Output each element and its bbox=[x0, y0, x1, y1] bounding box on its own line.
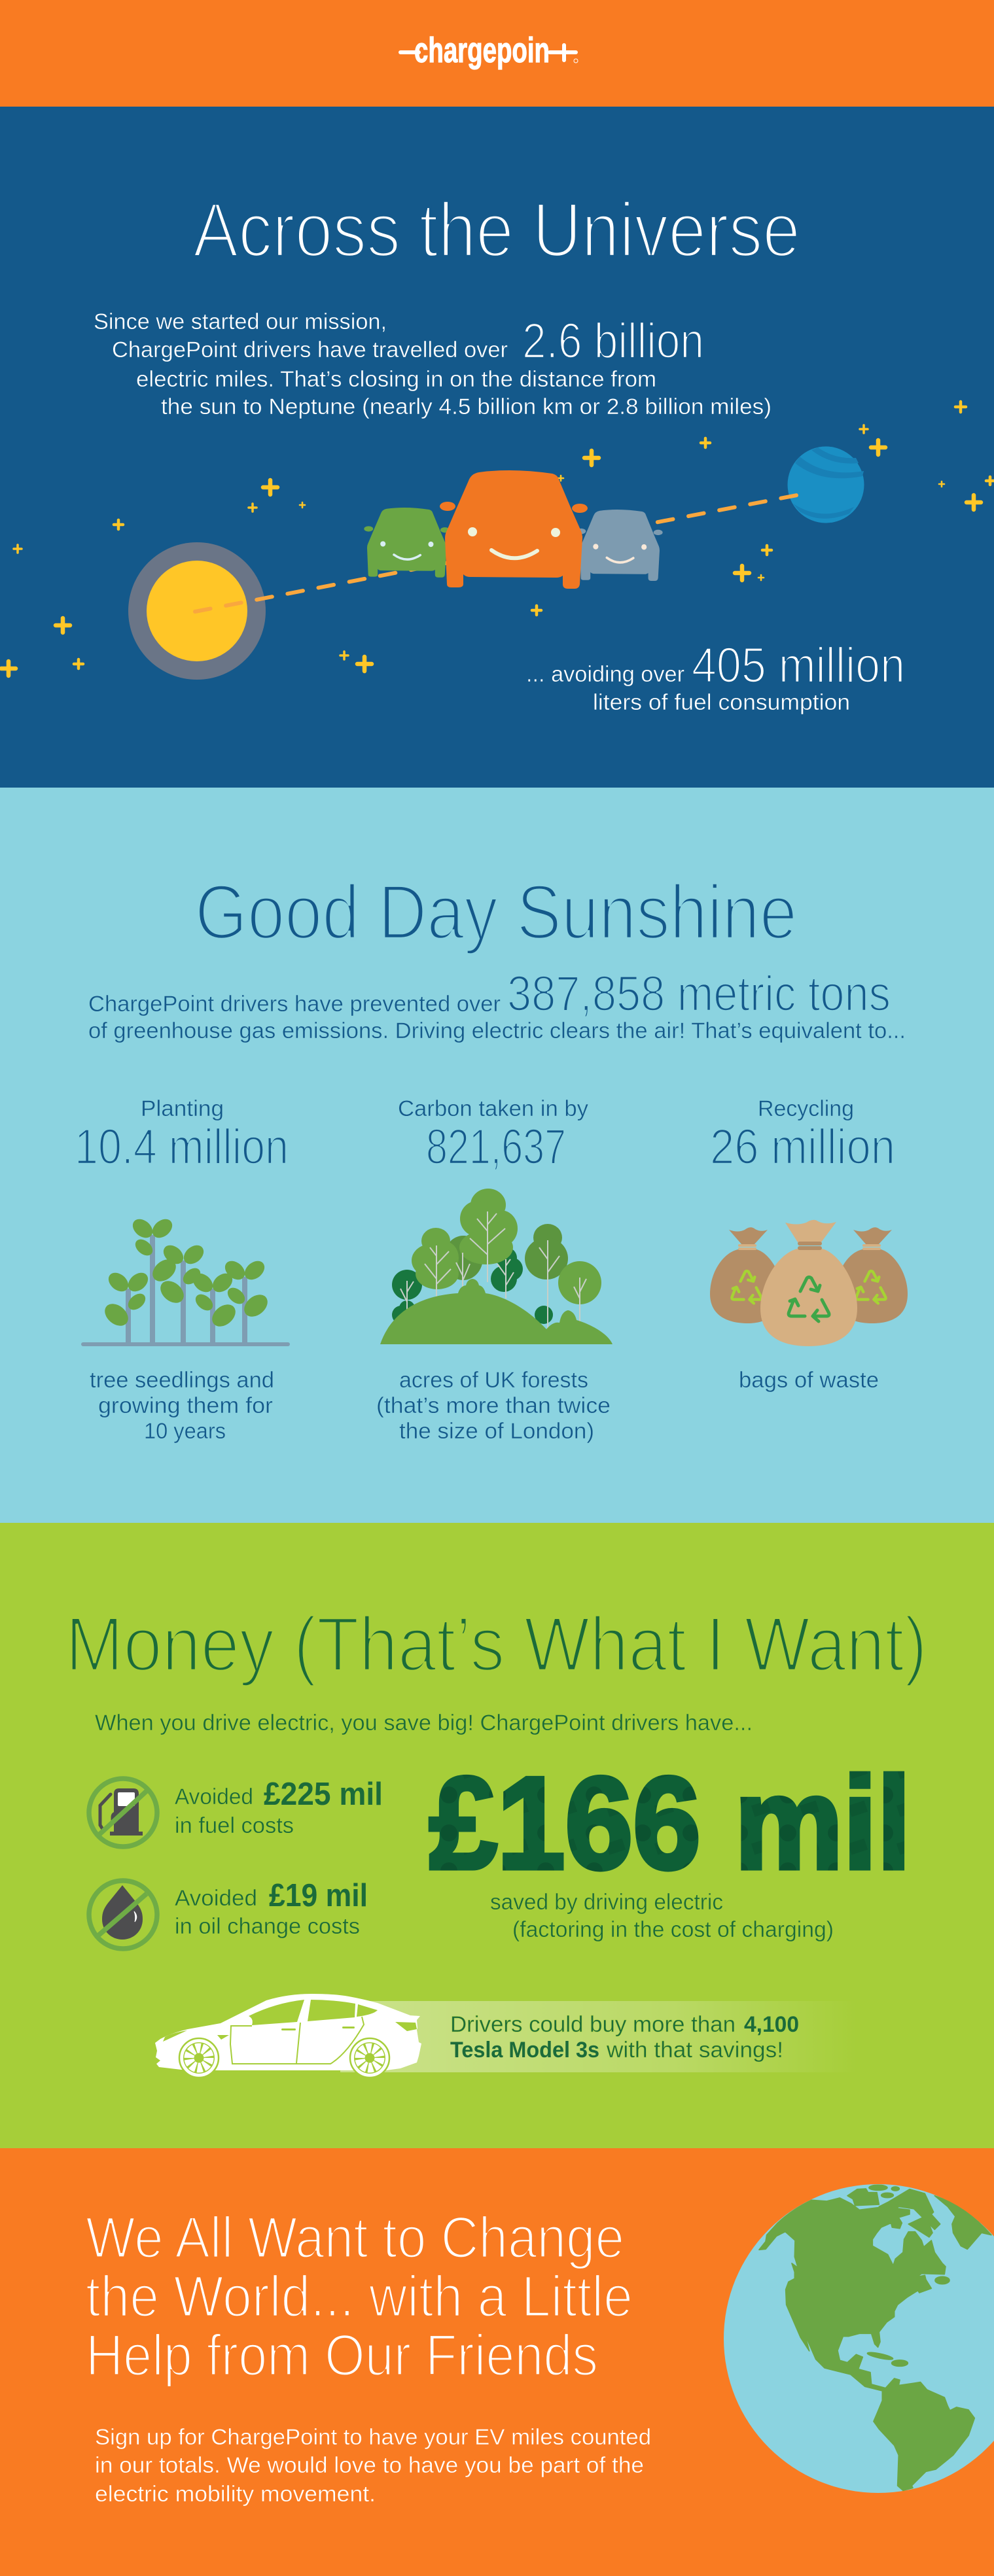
text block: emissions prevented: of greenhouse gas emissions. Driving electric clears the air! That’s equivalent to... bbox=[88, 1018, 906, 1043]
text block: fuel costs bbox=[175, 1777, 383, 1838]
text block: planting: growing them for bbox=[98, 1393, 273, 1418]
icon: no fuel pump bbox=[89, 1779, 157, 1847]
text block: mission distance: Since we started our mission, bbox=[94, 309, 387, 334]
text block: fuel avoided: ... avoiding over bbox=[526, 662, 684, 687]
text block: tesla savings bbox=[450, 2012, 799, 2063]
text block: sign up bbox=[95, 2425, 651, 2507]
text block: saved by driving bbox=[490, 1890, 834, 1942]
text block: carbon: acres of UK forests bbox=[399, 1368, 588, 1393]
text block: planting: tree seedlings and bbox=[90, 1368, 274, 1393]
heading: Good Day Sunshine: Good Day Sunshine bbox=[195, 869, 797, 956]
text block: mission distance: ChargePoint drivers have travelled over bbox=[112, 338, 508, 362]
text block: mission distance: 2.6 billion bbox=[522, 313, 704, 369]
logo: chargepoint: chargepoin bbox=[414, 31, 550, 70]
text block: emissions prevented: ChargePoint drivers have prevented over bbox=[88, 992, 501, 1017]
text block: tesla savings: 4,100 bbox=[744, 2012, 799, 2037]
text block: fuel avoided: liters of fuel consumption bbox=[593, 690, 850, 715]
text block: recycling: Recycling bbox=[758, 1096, 854, 1121]
text block: oil change costs: £19 mil bbox=[269, 1878, 368, 1913]
heading: We All Want to Change the World: Help from Our Friends bbox=[86, 2322, 598, 2388]
text block: carbon: the size of London) bbox=[399, 1419, 594, 1444]
text block: recycling: 26 million bbox=[710, 1119, 895, 1175]
icon: recycle symbol left bbox=[732, 1271, 762, 1303]
big number: 166 mil: £166 mil bbox=[429, 1750, 911, 1896]
text block: mission distance: the sun to Neptune (nearly 4.5 billion km or 2.8 billion miles) bbox=[161, 394, 772, 419]
text block: recycling bbox=[710, 1096, 895, 1393]
icon: recycle symbol centre bbox=[789, 1277, 829, 1321]
text block: carbon bbox=[376, 1096, 611, 1444]
text block: mission distance bbox=[94, 309, 772, 419]
text block: fuel costs: £225 mil bbox=[264, 1777, 383, 1812]
text block: save big: When you drive electric, you save big! ChargePoint drivers have... bbox=[95, 1711, 753, 1735]
text block: oil change costs bbox=[175, 1878, 368, 1939]
text block: planting: 10.4 million bbox=[75, 1119, 289, 1175]
text block: tesla savings: Tesla Model 3s bbox=[450, 2038, 599, 2063]
icon: globe bbox=[724, 2184, 994, 2493]
text block: fuel costs: Avoided bbox=[175, 1784, 253, 1809]
text block: planting bbox=[75, 1096, 289, 1444]
icon: waste bags bbox=[710, 1220, 908, 1346]
text block: carbon: (that’s more than twice bbox=[376, 1393, 611, 1418]
icon: grey car bbox=[577, 510, 663, 581]
text block: oil change costs: in oil change costs bbox=[175, 1914, 360, 1939]
text block: carbon: Carbon taken in by bbox=[398, 1096, 588, 1121]
text block: planting: 10 years bbox=[144, 1419, 226, 1444]
panel: money bbox=[0, 1523, 994, 2148]
icon: white car bbox=[155, 1994, 421, 2078]
callout band bbox=[340, 2001, 857, 2072]
panel: across the universe bbox=[0, 107, 994, 788]
text block: carbon: 821,637 bbox=[426, 1119, 566, 1175]
icon: recycle symbol right bbox=[856, 1271, 886, 1303]
icon: green car bbox=[364, 508, 450, 578]
text block: sign up: electric mobility movement. bbox=[95, 2482, 376, 2507]
icon: seedlings bbox=[81, 1215, 290, 1346]
text block: fuel costs: in fuel costs bbox=[175, 1813, 294, 1838]
text block: tesla savings: with that savings! bbox=[606, 2038, 783, 2063]
text block: fuel avoided: 405 million bbox=[692, 638, 905, 693]
text block: sign up: in our totals. We would love to have you be part of the bbox=[95, 2453, 644, 2478]
heading: Across the Universe: Across the Universe bbox=[193, 187, 800, 273]
text block: saved by driving: saved by driving electric bbox=[490, 1890, 723, 1915]
heading: We All Want to Change the World bbox=[86, 2204, 633, 2388]
heading: Money: Money (That’s What I Want) bbox=[65, 1601, 927, 1688]
text block: emissions prevented: 387,858 metric tons bbox=[507, 966, 891, 1022]
panel: change the world bbox=[0, 2148, 994, 2576]
text block: emissions prevented bbox=[88, 966, 906, 1043]
panel: header bbox=[0, 0, 994, 107]
text block: fuel avoided bbox=[526, 638, 905, 715]
heading: We All Want to Change the World: the World... with a Little bbox=[86, 2263, 633, 2329]
stars bbox=[1, 402, 994, 676]
text block: recycling: bags of waste bbox=[739, 1368, 879, 1393]
text block: planting: Planting bbox=[141, 1096, 224, 1121]
arrow: dashed route from sun to neptune bbox=[195, 495, 800, 612]
text block: saved by driving: (factoring in the cost of charging) bbox=[512, 1917, 834, 1942]
icon: forest bbox=[380, 1189, 612, 1344]
heading: We All Want to Change the World: We All Want to Change bbox=[86, 2204, 624, 2270]
icon: sun bbox=[128, 542, 266, 680]
text block: mission distance: electric miles. That’s closing in on the distance from bbox=[136, 367, 656, 392]
text block: sign up: Sign up for ChargePoint to have your EV miles counted bbox=[95, 2425, 651, 2450]
panel: good day sunshine bbox=[0, 788, 994, 1523]
text block: oil change costs: Avoided bbox=[175, 1886, 257, 1911]
icon: no oil drop bbox=[89, 1881, 157, 1949]
icon: neptune bbox=[788, 446, 864, 523]
text block: tesla savings: Drivers could buy more than bbox=[450, 2012, 736, 2037]
icon: orange car bbox=[440, 470, 588, 589]
